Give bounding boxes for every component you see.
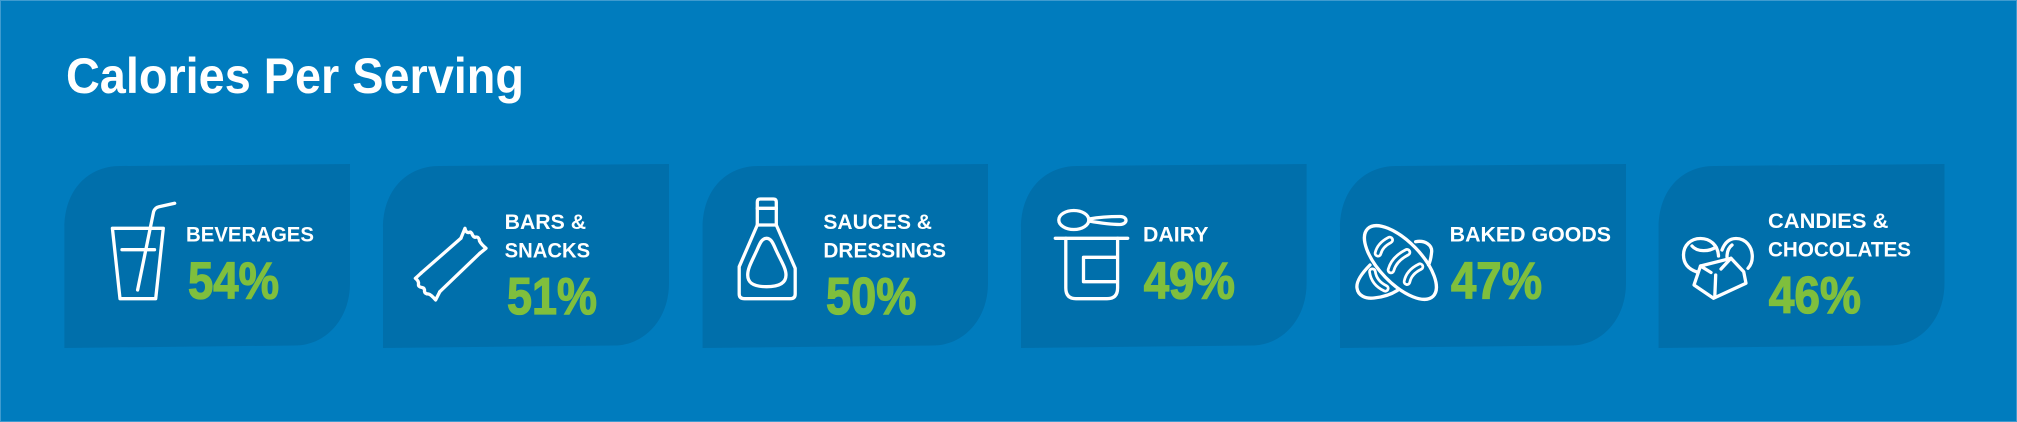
icon: sauce bottle bbox=[739, 199, 795, 299]
title: Calories Per Serving bbox=[66, 48, 524, 104]
value: 49%: 49% bbox=[1144, 252, 1235, 310]
label: sauces and dressings: SAUCES & bbox=[823, 211, 932, 234]
panel: beverages bbox=[64, 164, 350, 348]
panel: dairy bbox=[1021, 164, 1307, 348]
label: candies and chocolates bbox=[1768, 210, 1911, 262]
panel: sauces and dressings bbox=[703, 164, 988, 348]
icon: bread loaves bbox=[1353, 214, 1448, 311]
label: sauces and dressings bbox=[823, 211, 946, 263]
label: beverages: BEVERAGES bbox=[186, 223, 314, 246]
value: 54%: 54% bbox=[188, 252, 279, 310]
icon: yogurt cup and spoon bbox=[1055, 210, 1128, 299]
label: bars and snacks: SNACKS bbox=[505, 240, 590, 263]
icon: candies and chocolates bbox=[1684, 238, 1752, 298]
label: dairy: DAIRY bbox=[1143, 223, 1208, 246]
icon: snack bar bbox=[415, 228, 486, 300]
label: candies and chocolates: CANDIES & bbox=[1768, 210, 1888, 233]
label: bars and snacks bbox=[505, 211, 590, 263]
panel: candies and chocolates bbox=[1659, 164, 1944, 348]
value: 47%: 47% bbox=[1451, 252, 1542, 310]
value: 51%: 51% bbox=[507, 268, 597, 326]
panel: baked goods bbox=[1340, 164, 1626, 348]
icon: glass with straw bbox=[112, 203, 175, 299]
value: 50%: 50% bbox=[826, 268, 916, 326]
label: bars and snacks: BARS & bbox=[505, 211, 586, 234]
label: candies and chocolates: CHOCOLATES bbox=[1768, 239, 1911, 262]
label: sauces and dressings: DRESSINGS bbox=[823, 240, 946, 263]
panel: bars and snacks bbox=[383, 164, 669, 348]
value: 46%: 46% bbox=[1769, 267, 1861, 325]
label: baked goods: BAKED GOODS bbox=[1450, 223, 1611, 246]
